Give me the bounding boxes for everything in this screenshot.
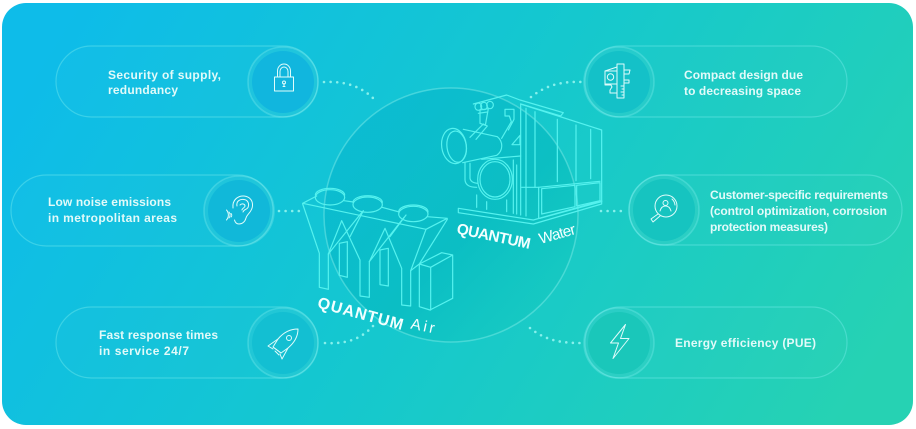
text: customer-specific: Customer-specific requirements bbox=[710, 188, 888, 202]
text: customer-specific: protection measures) bbox=[710, 220, 828, 234]
text: low noise: in metropolitan areas bbox=[48, 211, 177, 225]
connector dots: customer bbox=[601, 210, 626, 212]
connector dots: energy bbox=[530, 328, 581, 343]
icon: lightning bolt bbox=[610, 324, 629, 358]
text: fast response: in service 24/7 bbox=[99, 344, 189, 358]
illustration: Quantum Water unit bbox=[439, 95, 602, 253]
panel: customer-specific bbox=[629, 175, 902, 245]
text: fast response: Fast response times bbox=[99, 328, 218, 342]
connector dots: security bbox=[324, 82, 373, 98]
text: customer-specific: (control optimization, corrosion bbox=[710, 204, 887, 218]
text: compact: to decreasing space bbox=[684, 84, 801, 98]
icon: caliper bbox=[605, 64, 630, 98]
label: QUANTUM Air bbox=[316, 295, 436, 337]
label: QUANTUM Water: QUANTUM bbox=[455, 221, 532, 253]
label: QUANTUM Air: Air bbox=[409, 316, 436, 337]
central circle bbox=[324, 88, 578, 342]
panel: security of supply bbox=[56, 46, 318, 117]
label: QUANTUM Air: QUANTUM bbox=[316, 295, 405, 334]
text: energy: Energy efficiency (PUE) bbox=[675, 336, 816, 350]
panel: low noise bbox=[11, 175, 274, 246]
icon: padlock bbox=[274, 64, 294, 91]
panel: energy efficiency bbox=[584, 307, 847, 378]
icon: magnifier with person bbox=[651, 195, 677, 222]
text: low noise: Low noise emissions bbox=[48, 195, 171, 209]
panel: compact design bbox=[584, 46, 847, 117]
connector dots: noise bbox=[279, 210, 302, 212]
panel: fast response bbox=[56, 307, 318, 378]
text: compact: Compact design due bbox=[684, 68, 803, 82]
text: security: Security of supply, bbox=[108, 68, 221, 82]
icon: ear bbox=[226, 196, 253, 224]
icon: rocket bbox=[268, 329, 298, 359]
connector dots: compact bbox=[531, 82, 582, 97]
text: security: redundancy bbox=[108, 83, 178, 97]
label: QUANTUM Water: Water bbox=[537, 221, 578, 248]
illustration: Quantum Air unit bbox=[303, 188, 453, 337]
connector dots: response bbox=[325, 326, 373, 343]
label: QUANTUM Water bbox=[455, 221, 578, 253]
